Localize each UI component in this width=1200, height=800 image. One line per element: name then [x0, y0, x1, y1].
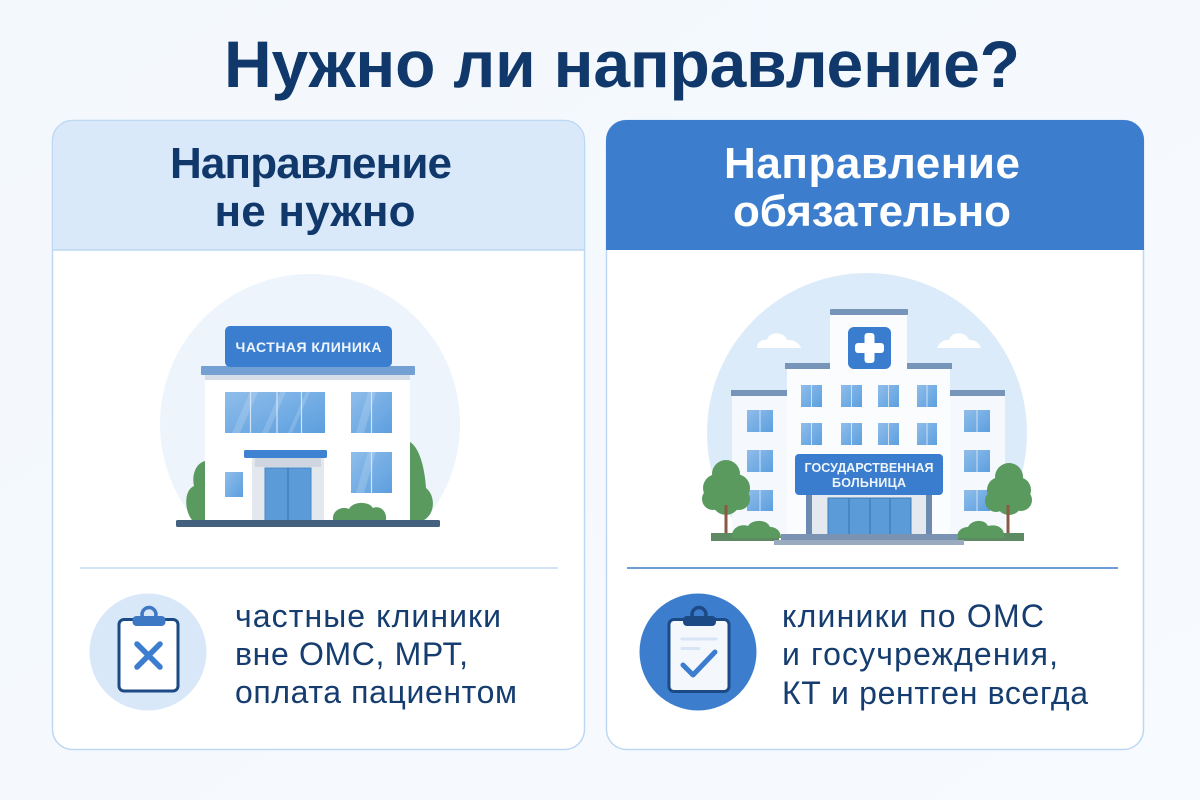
bushes behind building — [186, 442, 433, 520]
title: Нужно ли направление? — [224, 27, 1020, 101]
left panel header — [53, 121, 584, 250]
trees — [702, 460, 1032, 534]
ground and shrubs — [711, 521, 1024, 545]
cross sign — [848, 327, 891, 369]
left panel header: не нужно — [214, 187, 416, 236]
left panel text: вне ОМС, МРТ, — [235, 636, 468, 672]
panel: direction not needed — [52, 120, 584, 750]
windows — [225, 392, 392, 497]
panel: direction required — [606, 120, 1144, 750]
ground — [176, 520, 440, 527]
right panel text: клиники по ОМС — [782, 598, 1044, 634]
hospital sign: БОЛЬНИЦА — [832, 476, 906, 490]
sign: private clinic — [225, 326, 392, 367]
icon: clipboard with cross — [90, 594, 206, 710]
right panel header: обязательно — [733, 187, 1011, 236]
right panel header — [606, 120, 1144, 250]
main block and tower — [785, 309, 952, 535]
clouds — [757, 333, 981, 348]
left panel text: оплата пациентом — [235, 674, 517, 710]
front bush — [333, 503, 386, 520]
illustration: private clinic — [160, 274, 460, 527]
sign: private clinic: ЧАСТНАЯ КЛИНИКА — [236, 339, 382, 355]
entrance — [806, 495, 932, 535]
illustration: state hospital — [702, 273, 1032, 545]
hospital sign — [795, 454, 943, 495]
wings — [731, 390, 1005, 535]
hospital sign: ГОСУДАРСТВЕННАЯ — [804, 461, 934, 475]
right panel text: КТ и рентген всегда — [782, 675, 1088, 711]
left panel header: Направление — [170, 139, 452, 188]
left panel text — [235, 598, 517, 710]
entrance — [244, 450, 327, 521]
icon: clipboard with check — [640, 594, 756, 710]
left panel text: частные клиники — [235, 598, 501, 634]
divider — [80, 567, 558, 569]
right panel header: Направление — [724, 139, 1020, 188]
right panel text: и госучреждения, — [782, 636, 1058, 672]
hospital windows — [747, 385, 990, 511]
divider — [627, 567, 1118, 569]
right panel text — [782, 598, 1088, 711]
